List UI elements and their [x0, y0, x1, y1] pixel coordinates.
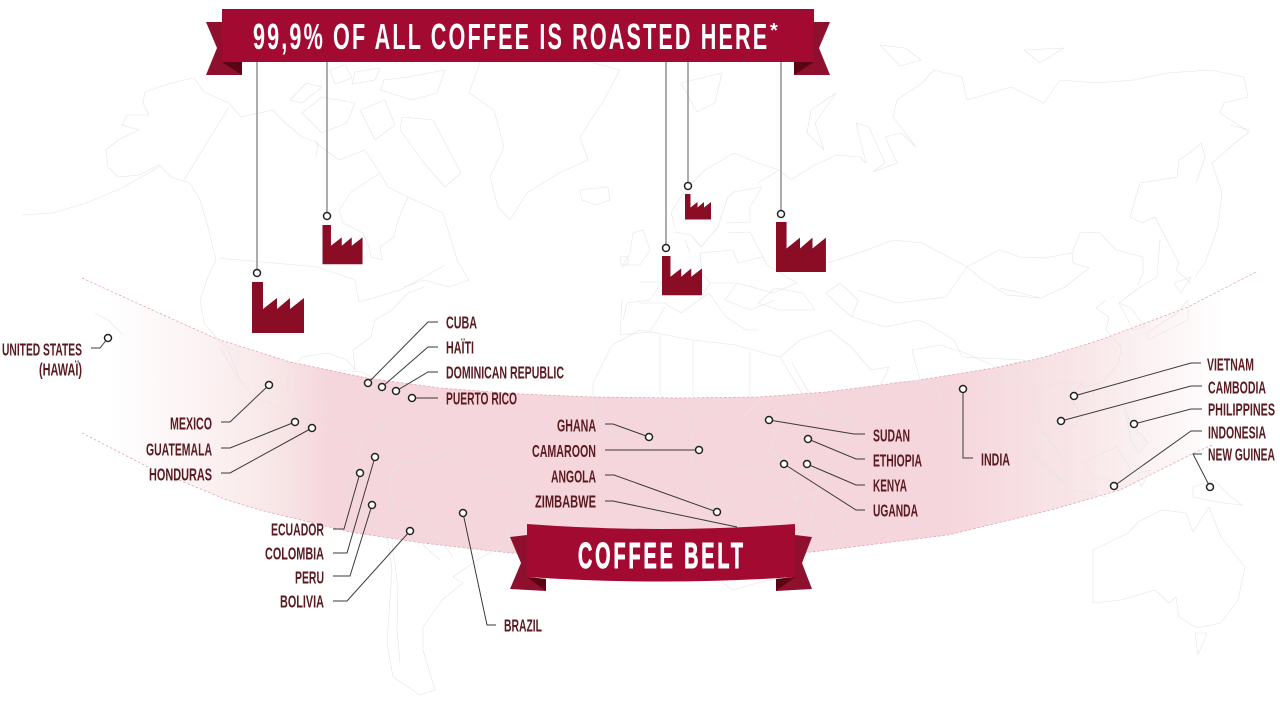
factory pins — [254, 60, 784, 276]
title ribbon — [206, 9, 830, 75]
label: Ghana: GHANA — [557, 416, 596, 436]
title asterisk: * — [770, 20, 778, 42]
label: Guatemala — [146, 418, 298, 460]
label: Colombia — [265, 454, 378, 564]
label: Haïti — [378, 338, 474, 390]
label: Uganda: UGANDA — [873, 500, 918, 520]
label: Mexico: MEXICO — [170, 414, 212, 434]
label: Haïti: HAÏTI — [446, 338, 474, 358]
label: New Guinea — [1193, 444, 1275, 490]
label: Colombia: COLOMBIA — [265, 544, 324, 564]
label: Philippines — [1130, 400, 1275, 428]
label: Puerto Rico — [408, 388, 517, 408]
label: Honduras — [149, 424, 316, 484]
label: Sudan: SUDAN — [873, 426, 910, 446]
label: Ecuador — [271, 470, 364, 540]
factory: western USA — [252, 282, 304, 333]
label: Ethiopia: ETHIOPIA — [873, 450, 922, 470]
label: United States (Hawaï): UNITED STATES — [2, 340, 82, 360]
label: Dominican Republic — [392, 362, 564, 394]
label: India: INDIA — [981, 450, 1010, 470]
label: Brazil: BRAZIL — [504, 616, 542, 636]
label: Mexico — [170, 382, 272, 434]
label: Cuba: CUBA — [446, 312, 477, 332]
label: Ghana — [557, 416, 652, 440]
label: Indonesia — [1110, 422, 1266, 490]
label: Kenya — [804, 460, 907, 496]
label: Puerto Rico: PUERTO RICO — [446, 388, 517, 408]
label: Sudan — [766, 416, 910, 446]
label: Camaroon: CAMAROON — [532, 441, 596, 461]
label: United States (Hawaï): (HAWAÏ) — [39, 360, 82, 380]
label: Angola — [551, 466, 720, 516]
label: Vietnam — [1070, 354, 1254, 400]
label: Peru: PERU — [295, 568, 324, 588]
label: Cambodia — [1058, 378, 1266, 424]
title: 99,9% OF ALL COFFEE IS ROASTED HERE — [253, 17, 767, 57]
label: Bolivia: BOLIVIA — [280, 592, 324, 612]
coffee belt ribbon — [510, 524, 812, 591]
factory: Canada — [322, 225, 363, 264]
label: Zimbabwe — [535, 492, 737, 527]
label: Bolivia — [280, 528, 414, 612]
label: India — [960, 386, 1010, 470]
label: Guatemala: GUATEMALA — [146, 440, 212, 460]
label: Zimbabwe: ZIMBABWE — [535, 492, 596, 512]
label: Angola: ANGOLA — [551, 466, 596, 486]
factory: Scandinavia — [685, 194, 711, 220]
ribbon heading: COFFEE BELT — [578, 537, 743, 577]
factory: Western Europe — [662, 256, 702, 295]
label: Ethiopia — [804, 436, 922, 470]
label: Ecuador: ECUADOR — [271, 520, 324, 540]
panel: coffee belt band — [60, 268, 1256, 557]
label: Camaroon — [532, 441, 702, 461]
label: Uganda — [780, 460, 918, 520]
label: Kenya: KENYA — [873, 476, 907, 496]
label: Cuba — [364, 312, 477, 386]
label: Peru — [295, 502, 376, 588]
label: Dominican Republic: DOMINICAN REPUBLIC — [446, 362, 564, 382]
label: Brazil — [460, 510, 542, 636]
factory: Russia — [776, 222, 826, 272]
label: Honduras: HONDURAS — [149, 464, 212, 484]
label: United States (Hawaï) — [2, 334, 112, 380]
